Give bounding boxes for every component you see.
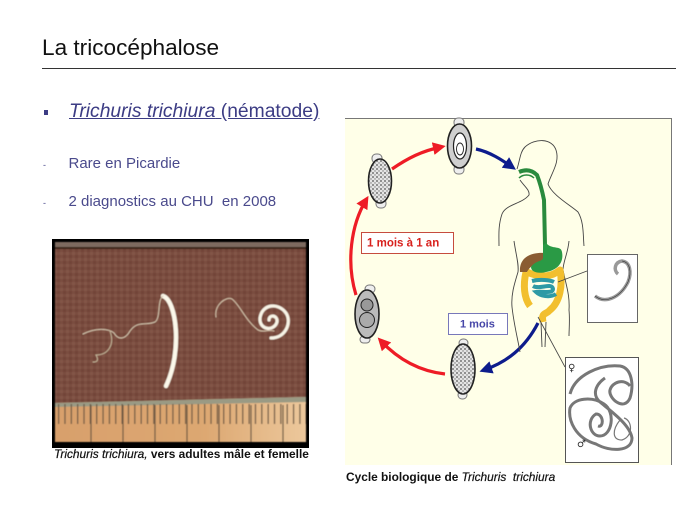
bullet marker (44, 110, 48, 115)
label: 1 mois a 1 an (362, 232, 454, 254)
heading: species name: Trichuris trichiura (nématode) (69, 101, 319, 122)
icon: egg bottom (451, 339, 475, 399)
title rule (42, 68, 676, 69)
female worm (216, 298, 288, 338)
diagram caption: Cycle biologique de Trichuris trichiura (346, 470, 555, 484)
label: 1 mois (448, 314, 508, 334)
icon: egg left (355, 285, 379, 343)
text block: rare in Picardie: Rare en Picardie (68, 155, 180, 172)
label: 1 mois: 1 mois (460, 318, 495, 330)
ruler (55, 397, 306, 442)
panel: life cycle diagram (345, 118, 672, 465)
label: 1 mois a 1 an: 1 mois à 1 an (367, 238, 439, 250)
title: La tricocéphalose (42, 35, 219, 60)
icon: egg top (448, 118, 472, 174)
arrow: blue to mouth (476, 149, 512, 167)
text block: diagnostics: - (43, 198, 46, 208)
stomach (531, 243, 562, 273)
inset: whipworm head detail (588, 254, 638, 322)
human body outline (499, 141, 584, 352)
arrow: red egg to egg (392, 147, 441, 169)
inset: adult male and female worms: ♂ (577, 439, 586, 450)
icon: egg upper left (368, 154, 392, 208)
inset: adult male and female worms (566, 358, 638, 462)
photo caption: Trichuris trichiura, vers adultes mâle et femelle (54, 447, 309, 461)
leader lines (538, 271, 587, 367)
liver (520, 253, 545, 272)
photo: adult worms on ruler (52, 239, 309, 448)
colon (524, 270, 561, 322)
arrow: red left side (351, 200, 366, 295)
text block: diagnostics: 2 diagnostics au CHU en 2008 (68, 193, 276, 210)
small intestine (532, 280, 556, 296)
male worm (83, 296, 176, 386)
inset: adult male and female worms: ♀ (568, 363, 575, 374)
digestive tract (519, 170, 562, 322)
arrow: blue bottom (484, 323, 538, 370)
text block: rare in Picardie: - (43, 160, 46, 170)
arrow: red bottom (381, 341, 445, 374)
